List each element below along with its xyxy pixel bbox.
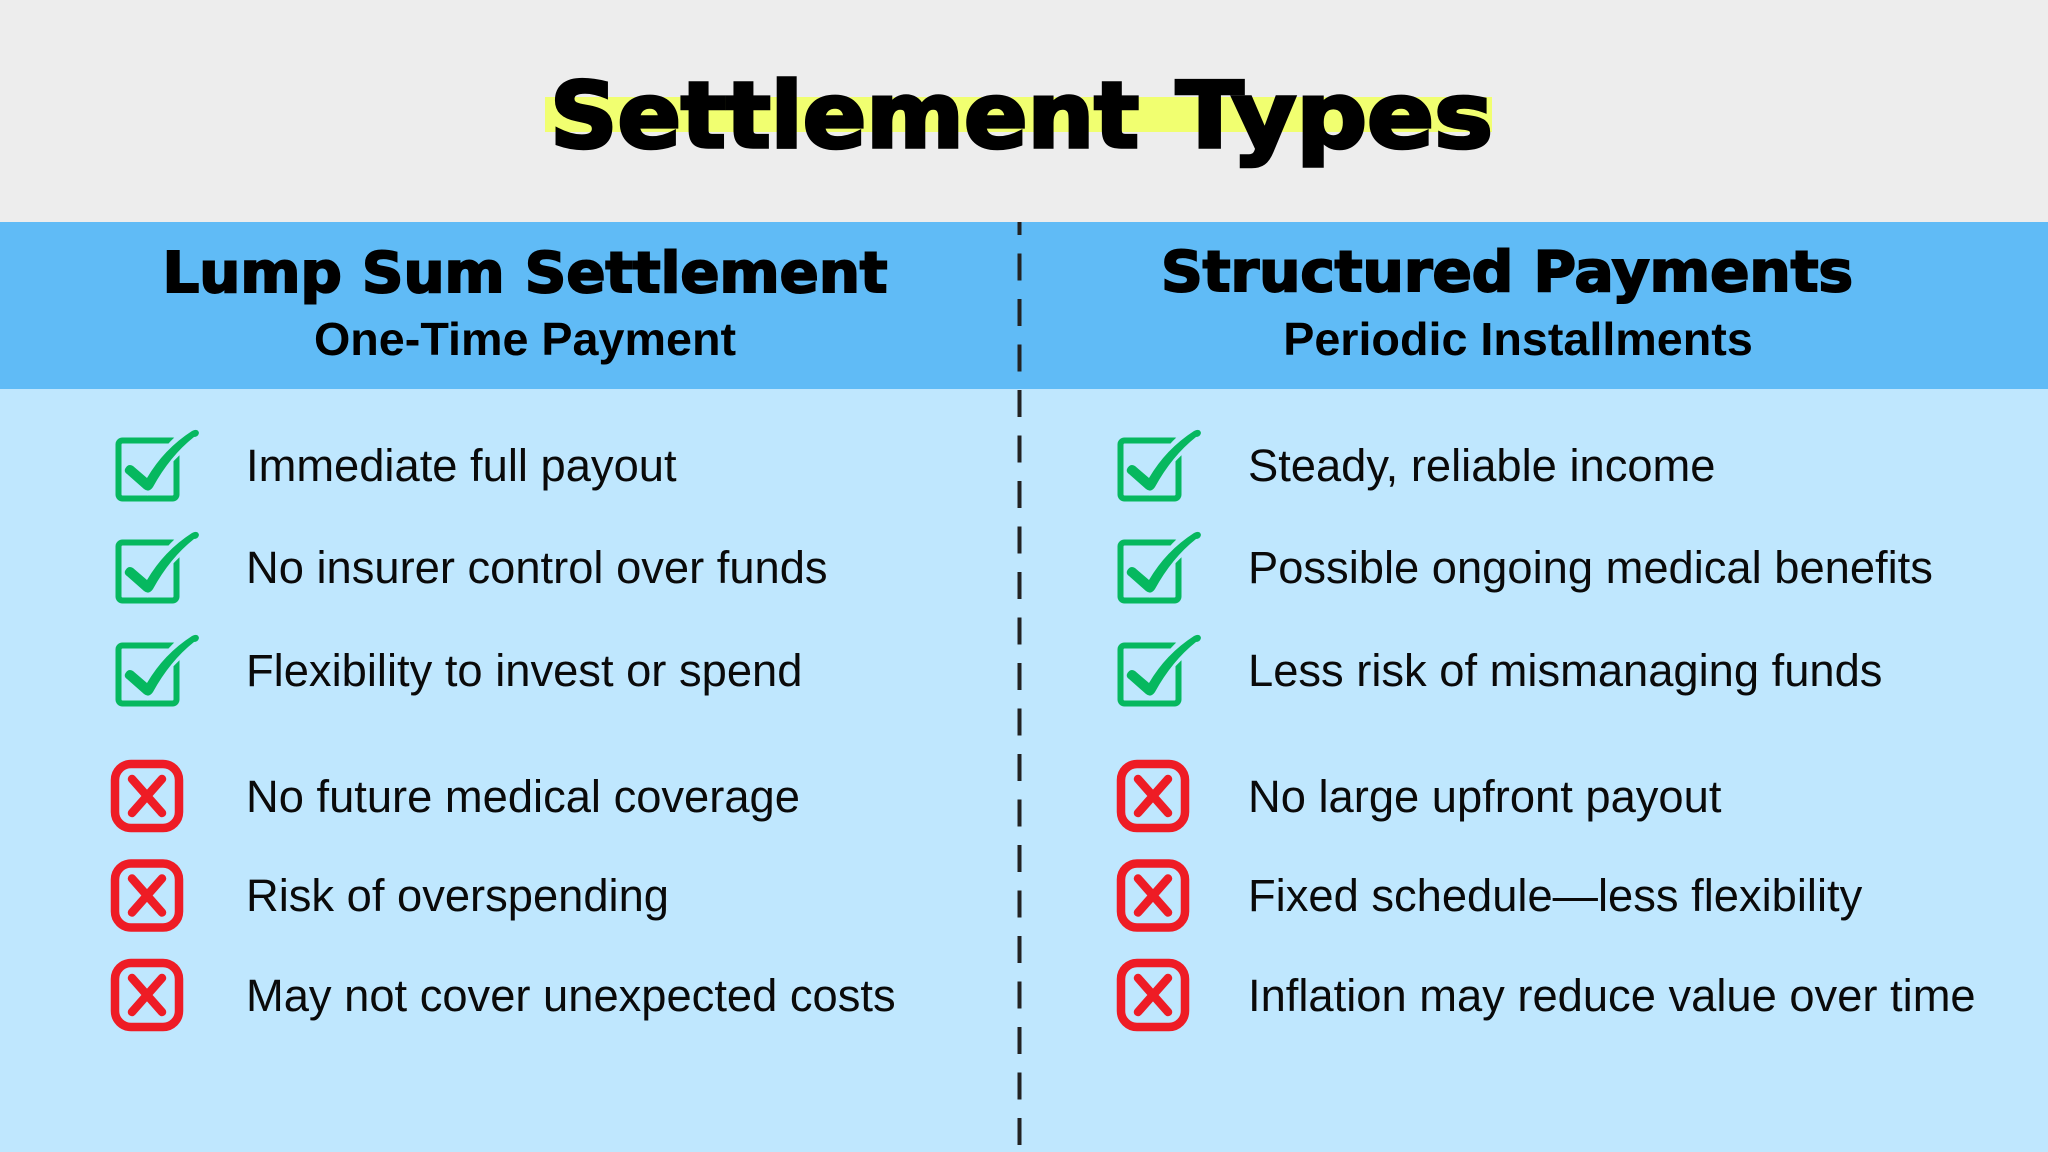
content panel: [0, 389, 2048, 1152]
con item 2: [115, 864, 669, 928]
pro item 1: Steady, reliable income: [1248, 440, 1715, 491]
panel: structured list: [1120, 428, 1976, 1027]
heading: structured: Periodic Installments: [1283, 313, 1753, 365]
pro item 1: [118, 428, 677, 498]
heading: lump sum: One-Time Payment: [314, 313, 736, 365]
pro item 2: [118, 530, 828, 600]
panel: lump sum list: [115, 428, 896, 1027]
con item 1: No large upfront payout: [1248, 771, 1722, 822]
pro item 1: Immediate full payout: [246, 440, 677, 491]
con item 2: [1121, 864, 1863, 928]
title background: [0, 0, 2048, 222]
con item 1: [115, 764, 800, 828]
con item 3: [115, 963, 896, 1027]
con item 3: Inflation may reduce value over time: [1248, 970, 1976, 1021]
pro item 1: [1120, 428, 1715, 498]
heading: lump sum: Lump Sum Settlement: [162, 241, 888, 306]
pro item 2: Possible ongoing medical benefits: [1248, 542, 1933, 593]
pro item 3: Less risk of mismanaging funds: [1248, 645, 1882, 696]
pro item 3: Flexibility to invest or spend: [246, 645, 802, 696]
header band: [0, 222, 2048, 389]
heading: structured: Structured Payments: [1161, 240, 1853, 305]
title: Types: [1176, 64, 1493, 169]
pro item 3: [1120, 633, 1882, 704]
con item 2: Fixed schedule—less flexibility: [1248, 870, 1863, 921]
title: [550, 64, 1493, 169]
heading: structured: [1161, 240, 1853, 365]
column divider: [1018, 222, 1022, 1152]
pro item 2: [1120, 530, 1933, 600]
con item 3: May not cover unexpected costs: [246, 970, 896, 1021]
con item 1: [1121, 764, 1722, 828]
con item 3: [1121, 963, 1976, 1027]
title: Settlement: [550, 64, 1139, 169]
pro item 3: [118, 633, 802, 704]
title highlight: [545, 97, 1492, 132]
con item 1: No future medical coverage: [246, 771, 800, 822]
pro item 2: No insurer control over funds: [246, 542, 828, 593]
heading: lump sum: [162, 241, 888, 365]
con item 2: Risk of overspending: [246, 870, 669, 921]
